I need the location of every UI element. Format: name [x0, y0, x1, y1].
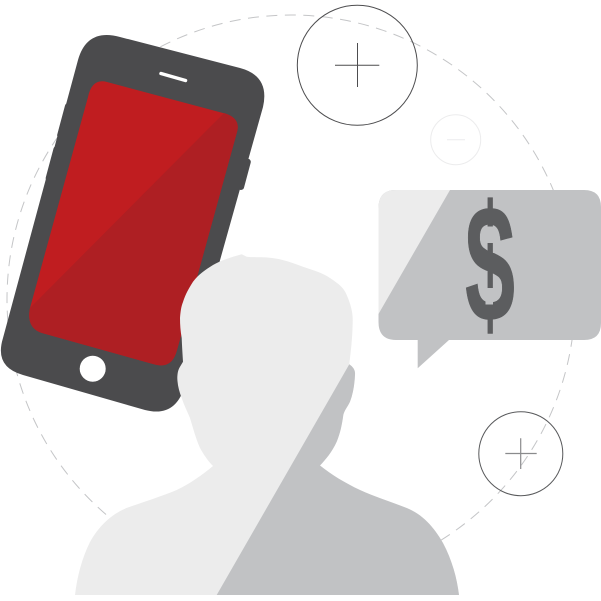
phone screen shaded half [29, 113, 238, 365]
icon: large plus circle [297, 5, 417, 125]
person shaded half [217, 364, 459, 595]
dollar sign: $ [465, 172, 515, 357]
bubble light corner [378, 190, 450, 314]
icon: person silhouette [75, 254, 459, 595]
phone home button [80, 356, 106, 382]
icon: faint minus circle [431, 115, 481, 165]
phone screen [29, 81, 238, 365]
icon: small plus circle [479, 412, 563, 496]
icon: smartphone [1, 35, 264, 412]
speech bubble with dollar sign [378, 172, 601, 368]
phone speaker [161, 74, 186, 80]
